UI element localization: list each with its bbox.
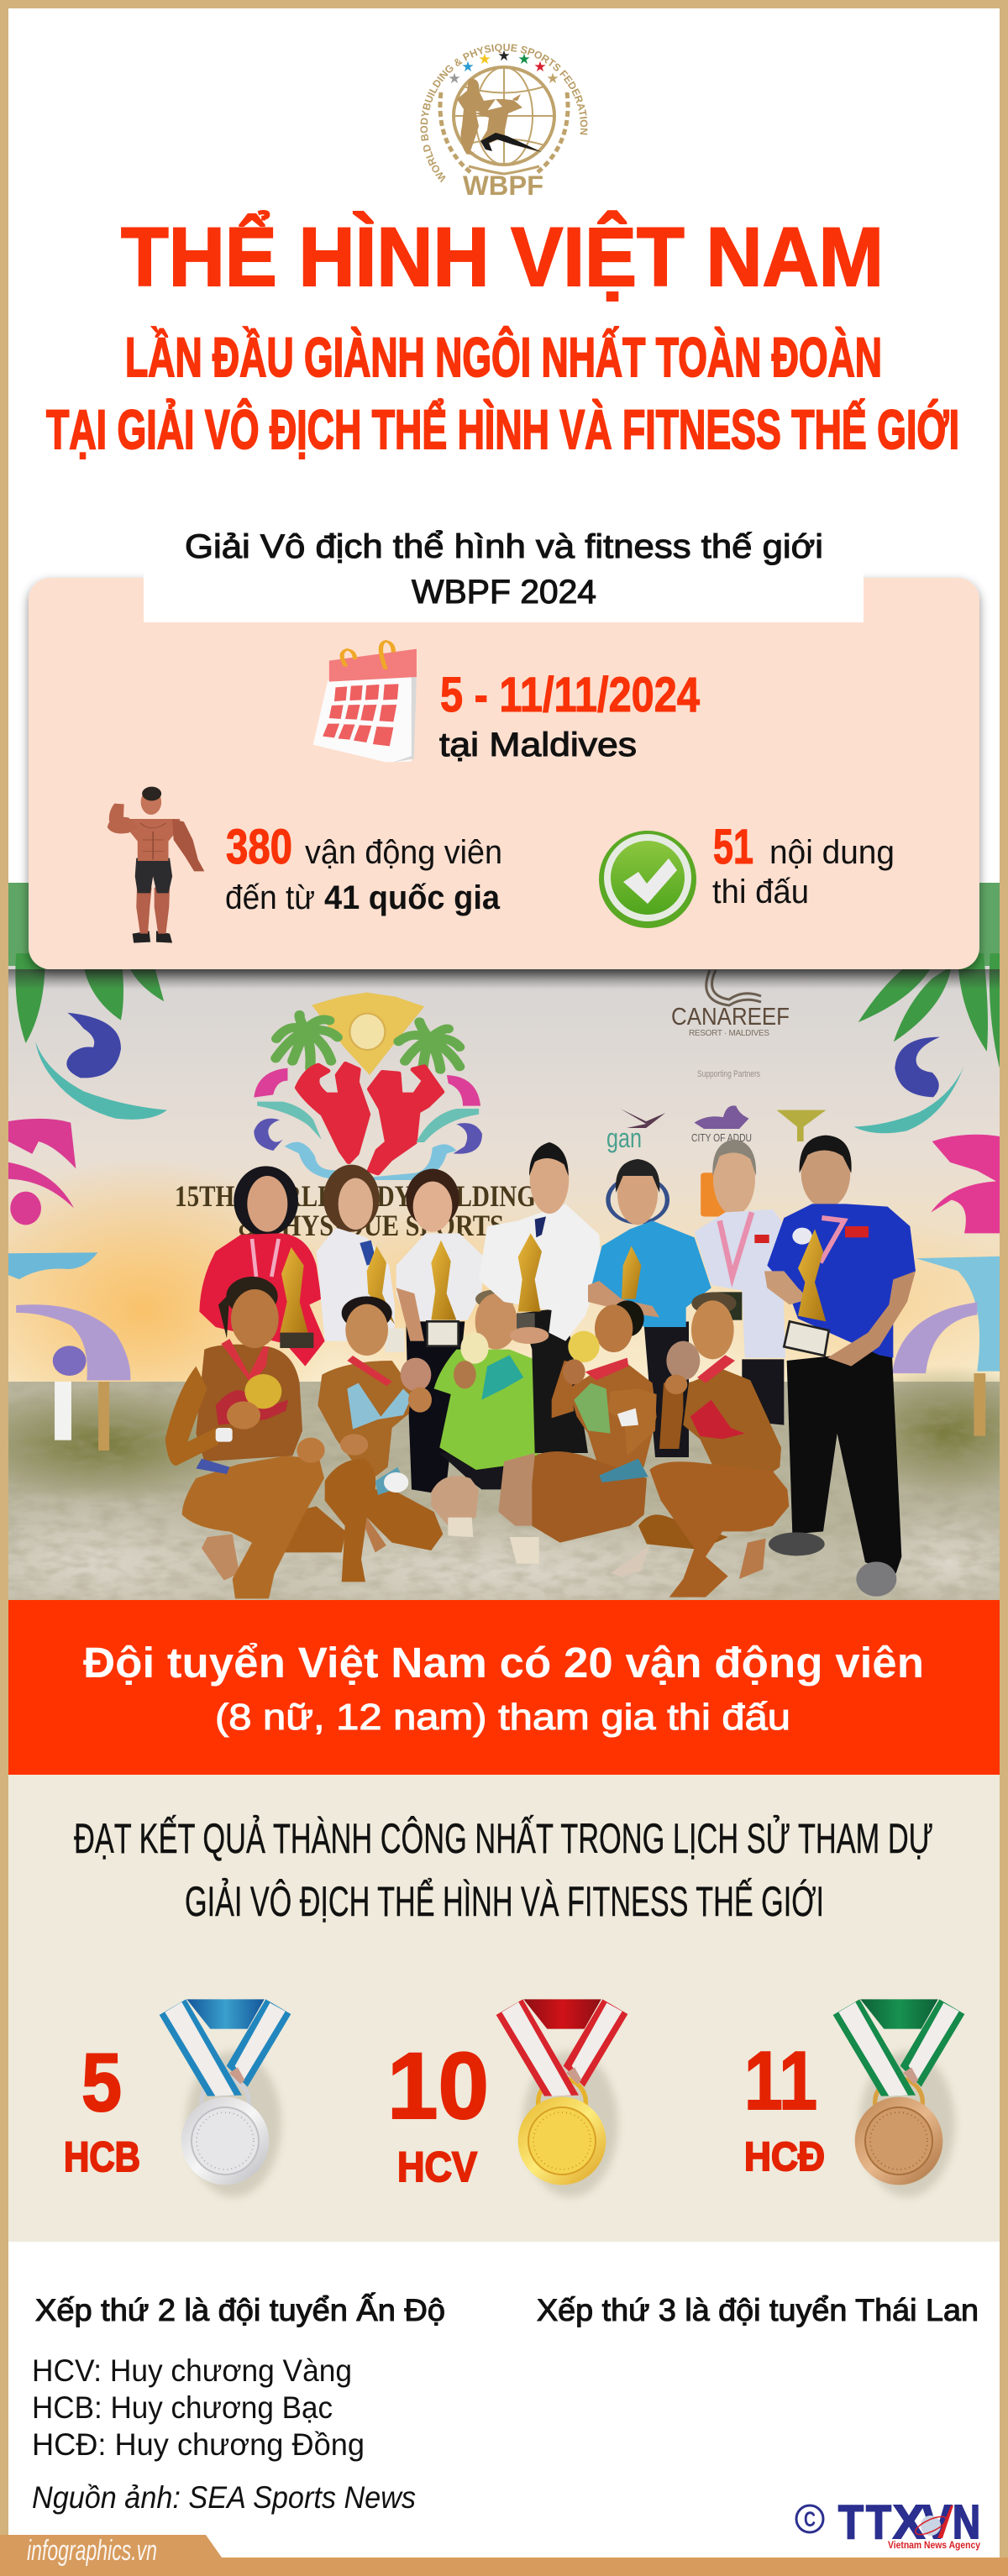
banner lettering: Supporting Partners: [697, 1069, 760, 1079]
panel: results: [8, 1775, 1000, 2242]
kneeling team member in green shirt: [431, 1290, 538, 1537]
stat: events: [712, 820, 895, 910]
left ornaments: [15, 953, 45, 1043]
gold count: HCV: [397, 2143, 478, 2190]
kneeling athlete 1: [165, 1277, 346, 1598]
logo stars: ★: [497, 48, 511, 64]
logo stars: ★: [517, 51, 531, 67]
back row man, pale polo: [695, 1140, 785, 1425]
back row woman, white t-shirt: [396, 1169, 498, 1495]
back row man, light blue polo: [588, 1159, 711, 1457]
stat: athletes: đến từ: [225, 879, 315, 916]
panel: tournament facts: [29, 528, 979, 969]
panel shadow over photo: [8, 969, 1000, 989]
championship logo on banner: [254, 993, 482, 1180]
photo: Vietnamese team on the beach in front of the championship banner: [0, 883, 1008, 1638]
icon: gold medal: [496, 1999, 627, 2197]
banner lettering: gan: [606, 1123, 642, 1153]
stat: events: thi đấu: [712, 874, 809, 910]
back row woman, red shirt: [199, 1166, 325, 1367]
rankings: Xếp thứ 2 là đội tuyển Ấn Độ: [35, 2293, 445, 2327]
logo: TTXVN: T: [838, 2495, 864, 2549]
banner lettering: RESORT · MALDIVES: [689, 1029, 769, 1038]
stat: events: 51: [713, 820, 753, 874]
stat: athletes: 380: [226, 820, 292, 874]
title: THỂ HÌNH VIỆT NAM: [121, 210, 884, 303]
kneeling athlete 2: [318, 1296, 443, 1582]
stat: athletes: 41 quốc gia: [324, 879, 501, 916]
team members, right half: [479, 1136, 916, 1598]
logo: TTXVN: C: [804, 2508, 816, 2531]
logo stars: ★: [461, 59, 475, 75]
banner lettering: [175, 1004, 790, 1242]
dates: 5 - 11/11/2024: [440, 668, 700, 722]
team members, left half: [165, 1165, 560, 1598]
banner lettering: & PHYSIQUE SPORTS: [238, 1209, 504, 1242]
logo: TTXVN: X: [893, 2495, 925, 2549]
icon: calendar: [313, 641, 417, 762]
banner lettering: CITY OF ADDU: [691, 1131, 752, 1144]
stat: athletes: [225, 820, 502, 916]
logo: TTXVN: N: [953, 2495, 980, 2549]
bronze count: [744, 2034, 825, 2180]
panel heading: WBPF 2024: [412, 574, 596, 611]
stat: athletes: vận động viên: [305, 834, 502, 871]
gold count: 10: [387, 2033, 489, 2138]
legend: medal abbreviations: HCĐ: Huy chương Đồng: [32, 2427, 365, 2462]
icon: bodybuilder: [108, 787, 204, 943]
panel: team size: [8, 1600, 1000, 1775]
back row woman, white shirt: [317, 1165, 405, 1352]
site address: infographics.vn: [27, 2535, 157, 2567]
icon: silver medal: [160, 1999, 291, 2197]
rankings: [35, 2293, 979, 2327]
legend: medal abbreviations: [32, 2353, 365, 2462]
silver count: 5: [81, 2036, 122, 2128]
panel heading: [185, 528, 823, 611]
panel: team size: Đội tuyển Việt Nam có 20 vận động viên: [83, 1639, 924, 1687]
gold count: [387, 2033, 489, 2190]
bronze count: 11: [744, 2034, 817, 2127]
logo figures: [457, 79, 496, 155]
back row man, white shirt: [479, 1142, 601, 1453]
logo wordmark: WBPF: [463, 171, 543, 201]
results heading: [74, 1814, 933, 1925]
logo stars: ★: [478, 51, 491, 67]
logo: TTXVN: [796, 2495, 980, 2551]
subtitle: [46, 326, 959, 460]
banner lettering: 15TH WORLD BODYBUILDING: [175, 1179, 536, 1213]
logo stars: ★: [533, 59, 547, 75]
location: tại Maldives: [439, 727, 637, 763]
logo: WBPF: WORLD BODYBUILDING & PHYSIQUE SPORTS FEDERATION: [420, 44, 588, 183]
panel: team size: (8 nữ, 12 nam) tham gia thi đấu: [215, 1697, 790, 1738]
logo: TTXVN: V: [922, 2495, 952, 2549]
legend: medal abbreviations: HCB: Huy chương Bạc: [32, 2390, 333, 2425]
banner lettering: CANAREEF: [671, 1004, 790, 1031]
kneeling athlete 3: [498, 1300, 657, 1577]
rankings: Xếp thứ 3 là đội tuyển Thái Lan: [537, 2293, 979, 2327]
stat: events: nội dung: [769, 834, 895, 871]
logo stars: ★: [448, 71, 461, 87]
photo source: Nguồn ảnh: SEA Sports News: [32, 2480, 416, 2515]
silver count: HCB: [64, 2133, 140, 2180]
back row man, dark blue polo with trophy: [764, 1136, 916, 1597]
logo: TTXVN: Vietnam News Agency: [888, 2539, 980, 2551]
icon: check mark: [599, 831, 696, 928]
logo: TTXVN: T: [866, 2495, 891, 2549]
footer band: [0, 2535, 1008, 2576]
logo stars: [448, 48, 559, 87]
legend: medal abbreviations: HCV: Huy chương Vàng: [32, 2353, 352, 2388]
right ornaments: [858, 966, 932, 1022]
logo stars: ★: [546, 71, 559, 87]
kneeling athlete 4: [638, 1292, 789, 1598]
Canareef swirl: [706, 970, 761, 1005]
bronze count: HCĐ: [744, 2135, 825, 2180]
panel heading: Giải Vô địch thể hình và fitness thế giới: [185, 528, 823, 565]
silver count: [64, 2036, 140, 2180]
sponsor marks: [621, 1109, 665, 1128]
icon: bronze medal: [833, 1999, 964, 2197]
